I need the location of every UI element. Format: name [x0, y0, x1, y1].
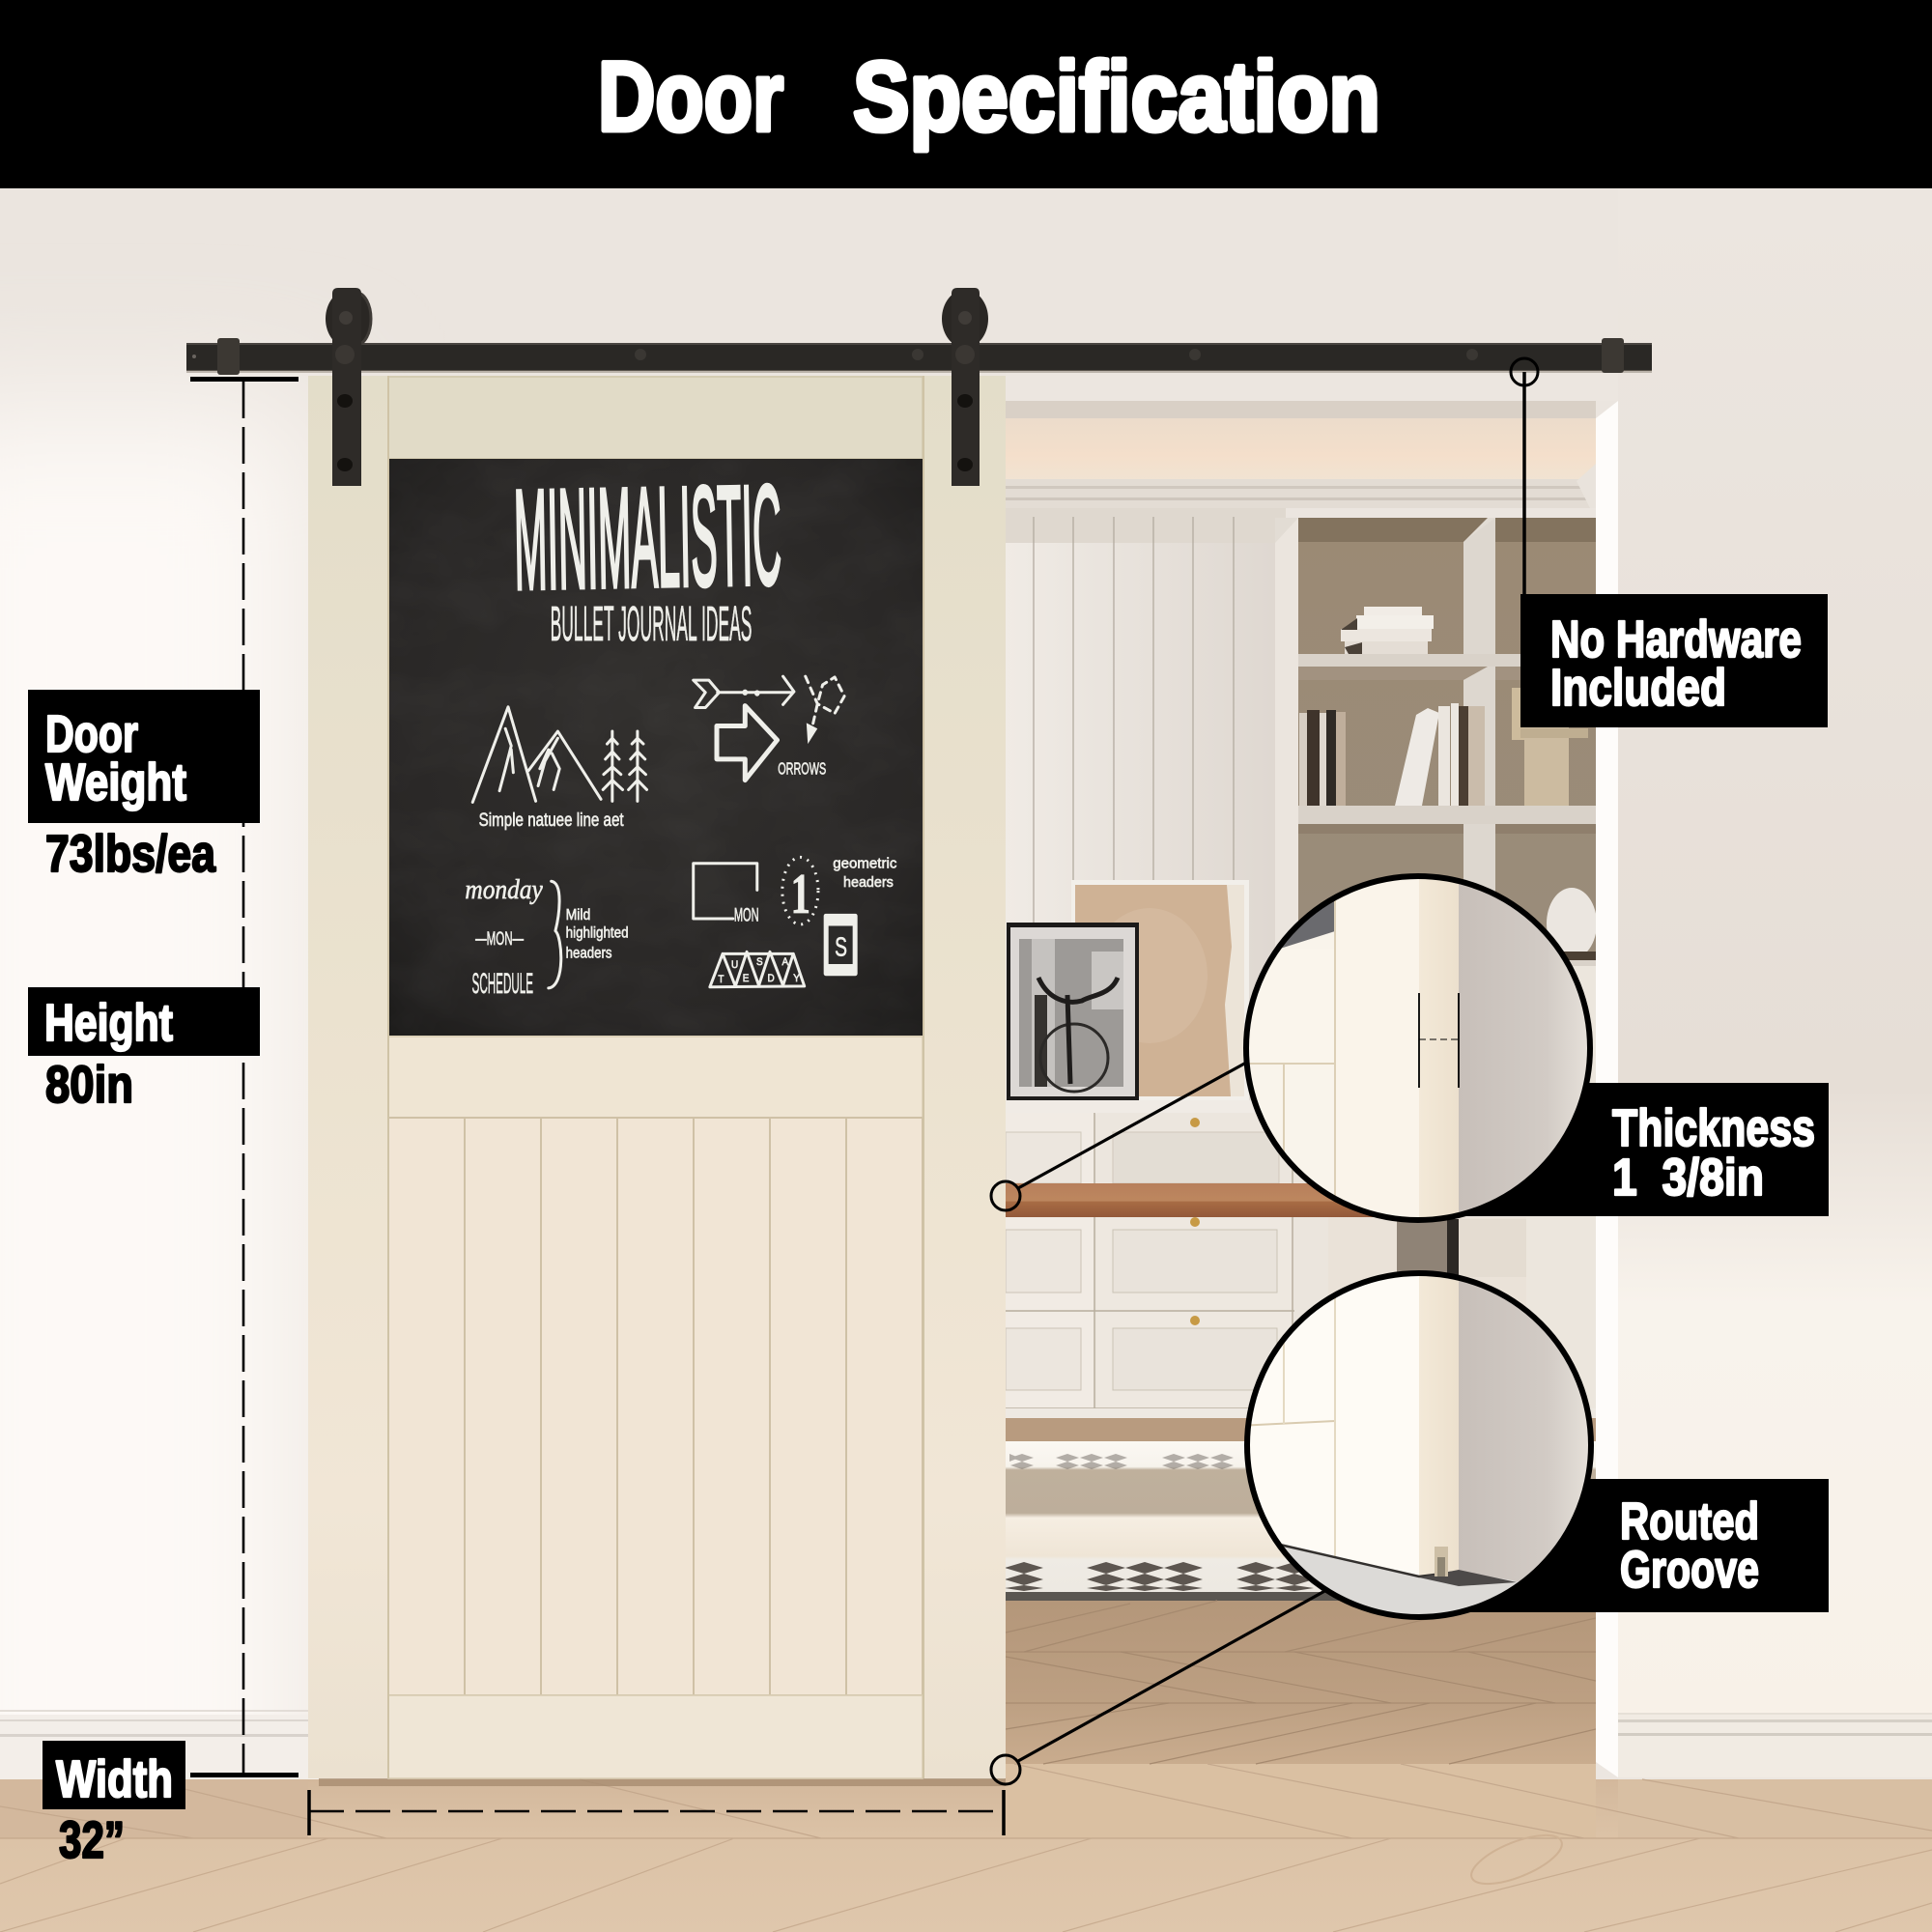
pointer to thickness detail [991, 1063, 1246, 1210]
title: Specification [853, 42, 1380, 152]
callout: routed groove [1449, 1479, 1829, 1612]
mountains and trees [472, 707, 647, 803]
beige art print [1071, 880, 1249, 1100]
ceiling band and cove light [1006, 400, 1596, 480]
rail stops [217, 338, 1624, 375]
geometric headers: headers [843, 875, 894, 891]
callout: door weight: Door [45, 705, 138, 763]
zoom circle: routed groove [1236, 1265, 1596, 1633]
callout: thickness: Thickness [1612, 1099, 1815, 1157]
right hanger strap [942, 288, 988, 486]
left hanger strap [326, 288, 372, 486]
callout: no hardware included: No Hardware [1550, 611, 1802, 668]
vertical planks [388, 1118, 923, 1695]
geometric headers [694, 856, 896, 987]
callout: thickness: 1 3/8in [1612, 1149, 1764, 1207]
bookcase [1275, 518, 1597, 1140]
door top rail [388, 377, 923, 459]
header examples: monday [465, 874, 544, 904]
door shadow on the floor [319, 1778, 1006, 1786]
callout: height: Height [44, 994, 173, 1052]
geometric headers: MON [734, 904, 759, 925]
book stack [1341, 607, 1434, 654]
geometric headers: geometric [833, 856, 896, 872]
barn door [308, 376, 1006, 1786]
header examples [465, 874, 629, 1000]
callout: door weight: 73lbs/ea [45, 825, 216, 883]
arrow doodles [694, 676, 844, 781]
chalk artwork [465, 455, 896, 1000]
geometric headers: 1 [790, 864, 810, 926]
text: MINIMALISTIC [513, 455, 782, 619]
rug diamonds [1005, 1454, 1314, 1591]
wall paneling [1006, 508, 1286, 1126]
callout: door weight [28, 690, 260, 883]
geometric headers: TUESDAY [718, 955, 800, 985]
pointer to routed groove detail [991, 1589, 1328, 1784]
callout: routed groove: Routed [1620, 1492, 1759, 1550]
thickness measure ticks [1419, 993, 1459, 1088]
shelf boards [1298, 654, 1596, 972]
interior floor [1006, 1601, 1596, 1764]
callout: door weight: Weight [45, 753, 186, 811]
chalk arrows caption: ORROWS [778, 759, 826, 779]
callout: no hardware included [1511, 358, 1828, 727]
header bar [0, 0, 1932, 188]
ceramic vase [1547, 888, 1597, 960]
callout: height: 80in [45, 1056, 133, 1114]
zoom circle: door thickness [1236, 869, 1594, 1227]
left baseboard [0, 1710, 308, 1779]
door opening jamb [1006, 371, 1618, 1777]
header examples: headers [566, 945, 611, 961]
callout: width [43, 1741, 185, 1869]
barn door track rail [186, 338, 1652, 375]
callout: height [28, 987, 260, 1114]
front floor [0, 1764, 1932, 1932]
title: Door [598, 42, 783, 152]
title [598, 42, 1380, 152]
table lamp [1512, 688, 1588, 806]
middle rail [388, 1037, 923, 1118]
cabinets [1006, 1100, 1334, 1419]
upright books [1299, 703, 1485, 806]
geometric headers: S [835, 931, 847, 962]
chalk artwork: BULLET JOURNAL IDEAS [551, 597, 752, 652]
chalk caption: Simple natuee line aet [479, 810, 624, 830]
header examples: highlighted [566, 924, 629, 942]
callout: no hardware included: Included [1550, 659, 1726, 717]
callout: thickness [1449, 1083, 1829, 1216]
right baseboard [1618, 1713, 1932, 1777]
side wall panel [1006, 966, 1596, 1449]
height dimension line [190, 377, 298, 1777]
header examples: SCHEDULE [472, 968, 533, 1000]
black framed bicycle photo [1007, 880, 1249, 1100]
crown moulding [1006, 464, 1596, 508]
callout: width: 32” [59, 1811, 125, 1869]
patterned rug [1005, 1441, 1596, 1601]
callout: width: Width [56, 1750, 173, 1808]
rail bolts [635, 349, 1478, 360]
bottom rail [388, 1695, 923, 1778]
room seen through the opening [1005, 400, 1597, 1764]
walnut countertop [1006, 1183, 1392, 1217]
door body [308, 376, 1006, 1778]
chalkboard panel [389, 455, 923, 1036]
width dimension line [309, 1790, 1004, 1835]
header examples: Mild [566, 906, 590, 923]
callout: routed groove: Groove [1620, 1541, 1759, 1599]
header examples: —MON— [475, 927, 524, 949]
